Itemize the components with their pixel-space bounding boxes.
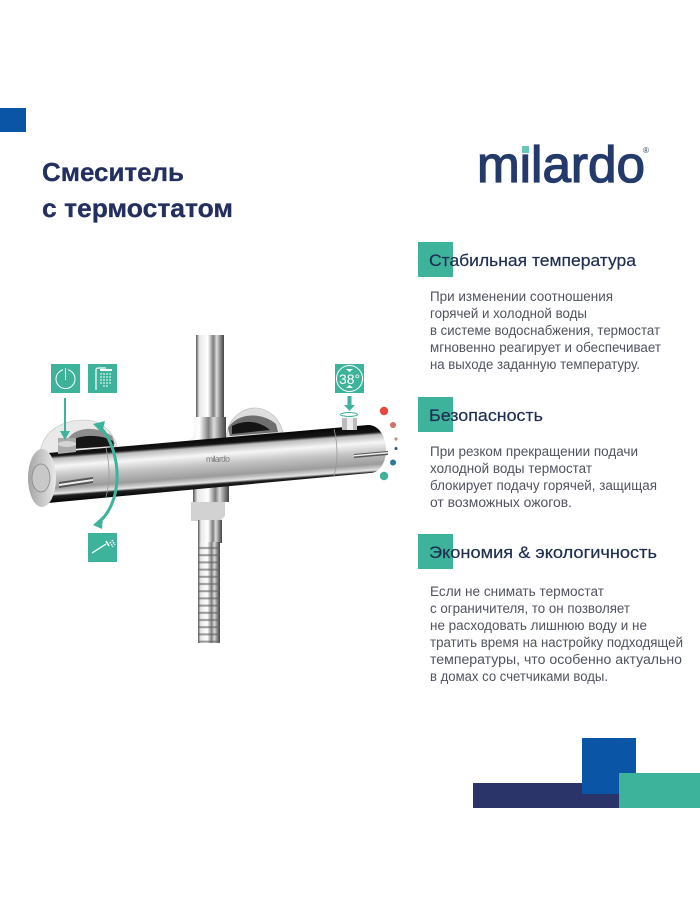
panel: safety: холодной воды термостат <box>430 461 592 476</box>
panel: safety: При резком прекращении подачи <box>430 444 638 459</box>
left lever <box>59 477 93 488</box>
panel: safety <box>418 397 657 510</box>
flexible hose <box>198 542 220 643</box>
panel: safety: от возможных ожогов. <box>430 495 572 510</box>
small brand mark: milardo <box>206 454 230 464</box>
rail collar <box>180 417 226 445</box>
title: с термостатом <box>42 193 233 223</box>
panel: stable temperature: на выходе заданную температуру. <box>430 357 640 372</box>
bottom corner blocks <box>473 738 700 808</box>
panel: stable temperature <box>418 242 661 372</box>
arrow: down to temperature stop <box>340 396 358 416</box>
panel: stable temperature: горячей и холодной воды <box>430 306 587 321</box>
wall mount right <box>226 408 283 438</box>
panel: economy and ecology: не расходовать лишнюю воду и не <box>430 618 647 633</box>
lower outlet fitting <box>193 484 229 502</box>
panel: economy and ecology: с ограничителя, то он позволяет <box>430 601 630 616</box>
panel: economy and ecology: Если не снимать термостат <box>430 584 604 599</box>
panel: economy and ecology: Экономия & экологичность <box>429 543 657 562</box>
left end cap <box>28 449 56 507</box>
panel: safety: Безопасность <box>429 406 543 425</box>
panel: stable temperature: При изменении соотношения <box>430 289 613 304</box>
wall mount left <box>40 420 117 456</box>
thermostat body <box>48 425 386 503</box>
corner accent: blue square <box>0 108 26 132</box>
hexagon nut <box>191 502 225 521</box>
panel: economy and ecology: тратить время на настройку подходящей <box>430 635 683 650</box>
panel: economy and ecology: в домах со счетчиками воды. <box>430 669 608 684</box>
icon: overhead shower <box>88 364 117 393</box>
arrow: down to left knob <box>60 398 70 440</box>
left knob button <box>58 438 76 454</box>
icon: 38 degree temperature: 38° <box>339 371 360 387</box>
icon: 38 degree temperature <box>335 364 364 393</box>
logo: milardo: ® <box>643 146 649 155</box>
arrow: rotation arc <box>93 421 117 529</box>
logo: milardo: milardo <box>477 136 645 193</box>
right temperature stop <box>342 418 357 430</box>
panel: stable temperature: мгновенно реагирует и обеспечивает <box>430 340 661 355</box>
title <box>42 157 233 223</box>
panel: economy and ecology <box>418 534 683 684</box>
panel: stable temperature: Стабильная температура <box>429 251 637 270</box>
faucet illustration <box>28 335 388 643</box>
body seams <box>106 448 109 497</box>
icon: power button <box>51 364 80 393</box>
icon: hand shower <box>88 533 117 562</box>
decorative temperature dots <box>380 407 398 480</box>
panel: economy and ecology: температуры, что особенно актуально <box>430 652 682 667</box>
title: Смеситель <box>42 157 184 187</box>
panel: stable temperature: в системе водоснабжения, термостат <box>430 323 660 338</box>
right lever <box>354 451 388 458</box>
vertical shower rail <box>196 335 224 419</box>
panel: safety: блокирует подачу горячей, защищая <box>430 478 657 493</box>
